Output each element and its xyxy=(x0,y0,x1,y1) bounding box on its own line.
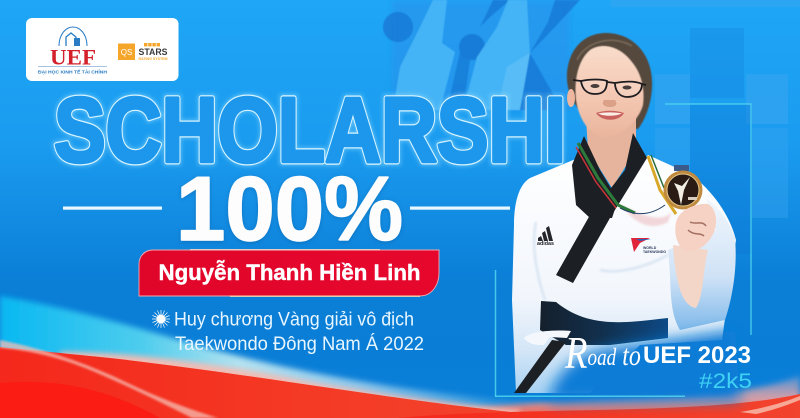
panel: logos card xyxy=(26,18,178,81)
script: Road to: to xyxy=(616,338,641,372)
belt hanging end xyxy=(514,340,566,393)
logo text: STARS: STARS xyxy=(138,47,168,58)
hashtag: #2k5 xyxy=(699,369,752,393)
medal ribbon xyxy=(576,143,676,214)
logo: QS badge xyxy=(118,44,135,60)
forearm xyxy=(673,245,708,308)
face xyxy=(576,46,644,137)
hair part highlight xyxy=(577,40,632,60)
World Taekwondo logo: WORLD xyxy=(643,246,657,250)
script: Road to: oad xyxy=(587,344,616,371)
lower body fade xyxy=(548,330,740,402)
ear xyxy=(567,89,575,107)
pink chest reflection xyxy=(622,205,672,226)
bottom wave: cyan and red xyxy=(0,296,800,418)
background tile pattern xyxy=(611,0,800,254)
medal xyxy=(664,165,702,210)
black collar right band xyxy=(556,133,647,283)
achievement text xyxy=(174,308,424,355)
gi shading xyxy=(534,222,668,300)
nose and mouth xyxy=(603,100,616,107)
name banner xyxy=(139,249,439,297)
glasses xyxy=(573,80,646,97)
light streak xyxy=(0,340,218,418)
belt knot xyxy=(524,331,571,345)
adidas logo xyxy=(537,226,554,247)
heading: SCHOLARSHI outline glow: SCHOLARSHI xyxy=(54,80,566,182)
logo rule xyxy=(38,65,107,68)
eyes xyxy=(590,84,632,90)
heading: 100%: 100% xyxy=(176,159,403,260)
slogan: UEF 2023: UEF 2023 xyxy=(643,342,751,369)
logo caption: ĐẠI HỌC KINH TẾ TÀI CHÍNH xyxy=(38,68,108,76)
finger lines xyxy=(688,222,706,236)
script: Road to: R xyxy=(564,328,587,379)
neck xyxy=(586,118,636,188)
gi body xyxy=(512,155,736,393)
heading: SCHOLARSHI outline glow: SCHOLARSHI xyxy=(54,80,566,182)
heading: SCHOLARSHI outline glow: SCHOLARSHI xyxy=(54,80,566,182)
rule right xyxy=(410,206,510,210)
hair back xyxy=(567,33,652,129)
decorative frame lines xyxy=(496,104,751,396)
background athletes silhouette xyxy=(383,0,580,110)
fist xyxy=(675,204,716,251)
World Taekwondo logo: TAEKWONDO xyxy=(643,250,666,254)
belt xyxy=(540,301,668,345)
achievement text: Taekwondo Đông Nam Á 2022 xyxy=(175,332,424,355)
icon: sparkle bullet xyxy=(152,310,170,328)
sleeve xyxy=(668,198,736,330)
athlete photo xyxy=(512,33,740,402)
adidas logo: adidas xyxy=(537,241,554,247)
rule left xyxy=(63,206,162,210)
logo: QS badge: QS xyxy=(121,48,132,57)
slogan xyxy=(564,328,752,393)
logo caption: rating system: RATING SYSTEM xyxy=(138,57,168,61)
bottom line overlay xyxy=(495,396,685,397)
icon: UEF building emblem xyxy=(59,27,87,46)
icon: QS stars row xyxy=(144,43,160,46)
logo text: UEF: UEF xyxy=(50,44,96,70)
World Taekwondo logo xyxy=(631,238,666,254)
black collar left xyxy=(572,136,618,218)
name text: Nguyễn Thanh Hiền Linh xyxy=(158,260,420,285)
achievement text: Huy chương Vàng giải vô địch xyxy=(174,308,414,330)
